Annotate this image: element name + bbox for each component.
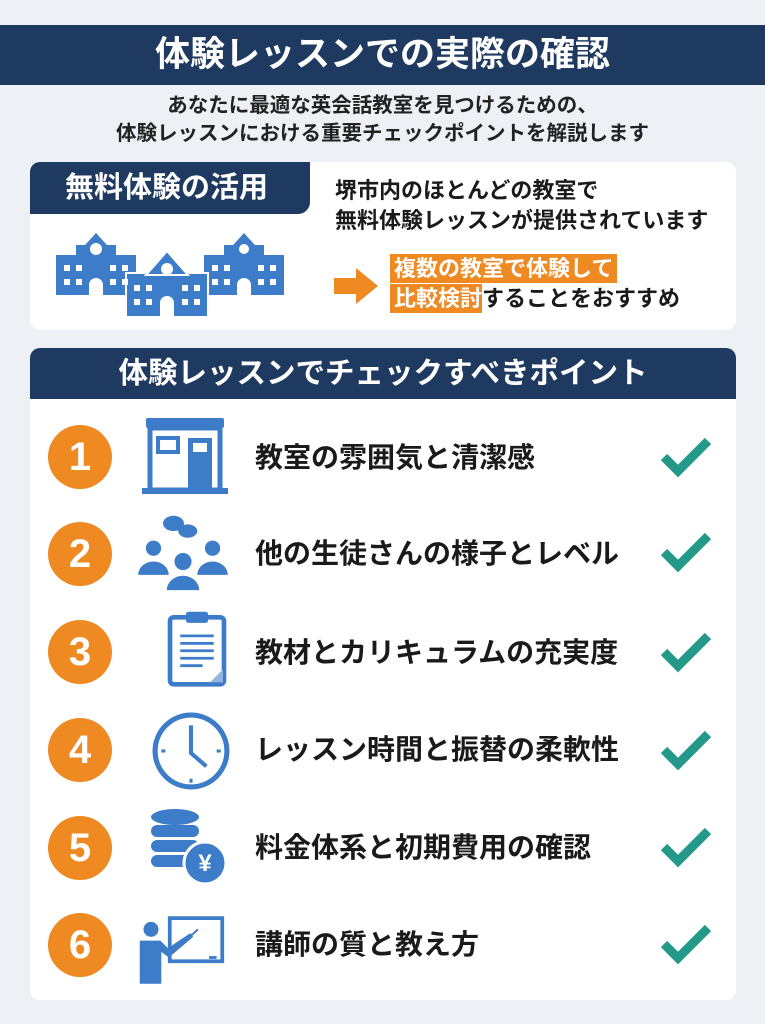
text: free lessons offered: 堺市内のほとんどの教室で bbox=[335, 178, 598, 203]
subtitle: あなたに最適な英会話教室を見つけるための、 bbox=[167, 94, 598, 117]
callout: recommendation: 複数の教室で体験して bbox=[394, 256, 613, 281]
callout: recommendation bbox=[390, 254, 680, 313]
callout: recommendation: 比較検討することをおすすめ bbox=[394, 286, 680, 311]
check bbox=[660, 730, 712, 770]
text: 講師の質と教え方 bbox=[255, 929, 479, 960]
row 5 bbox=[48, 809, 712, 882]
panel: free trial bbox=[30, 162, 736, 330]
title bar bbox=[0, 25, 765, 85]
check bbox=[660, 532, 712, 572]
row 2 bbox=[48, 516, 712, 590]
panel heading: 体験レッスンでチェックすべきポイント bbox=[119, 357, 647, 390]
row 5: 5 bbox=[69, 826, 91, 870]
panel heading bbox=[30, 162, 310, 214]
check bbox=[660, 632, 712, 672]
arrow bbox=[334, 268, 378, 304]
row 1: 1 bbox=[69, 435, 91, 479]
text: 他の生徒さんの様子とレベル bbox=[255, 538, 619, 569]
subtitle: 体験レッスンにおける重要チェックポイントを解説します bbox=[116, 122, 649, 145]
check bbox=[660, 924, 712, 964]
icon: students bbox=[138, 516, 228, 590]
check bbox=[660, 438, 712, 478]
text: 教材とカリキュラムの充実度 bbox=[255, 637, 618, 668]
panel heading: 無料体験の活用 bbox=[65, 172, 268, 204]
check bbox=[660, 828, 712, 868]
icon: school buildings bbox=[56, 233, 284, 316]
text: 料金体系と初期費用の確認 bbox=[255, 832, 591, 863]
row 2: 2 bbox=[69, 532, 91, 576]
text: 教室の雰囲気と清潔感 bbox=[255, 442, 535, 473]
text: レッスン時間と振替の柔軟性 bbox=[255, 734, 619, 765]
icon: coins yen bbox=[151, 809, 224, 882]
row 4 bbox=[48, 712, 712, 790]
icon: coins yen: ¥ bbox=[198, 850, 212, 877]
icon: clipboard bbox=[168, 612, 226, 687]
row 3: 3 bbox=[69, 630, 91, 674]
row 3 bbox=[48, 612, 712, 687]
title bar: 体験レッスンでの実際の確認 bbox=[155, 35, 610, 74]
row 6: 6 bbox=[69, 923, 91, 967]
text: free lessons offered bbox=[335, 178, 708, 233]
icon: teacher bbox=[140, 916, 224, 984]
panel: check points bbox=[30, 348, 736, 1000]
row 4: 4 bbox=[69, 728, 91, 772]
row 1 bbox=[48, 418, 712, 494]
row 6 bbox=[48, 913, 712, 984]
icon: classroom bbox=[142, 418, 228, 494]
panel heading bbox=[30, 348, 736, 399]
subtitle bbox=[116, 94, 649, 145]
icon: clock bbox=[152, 712, 230, 790]
text: free lessons offered: 無料体験レッスンが提供されています bbox=[335, 208, 708, 233]
